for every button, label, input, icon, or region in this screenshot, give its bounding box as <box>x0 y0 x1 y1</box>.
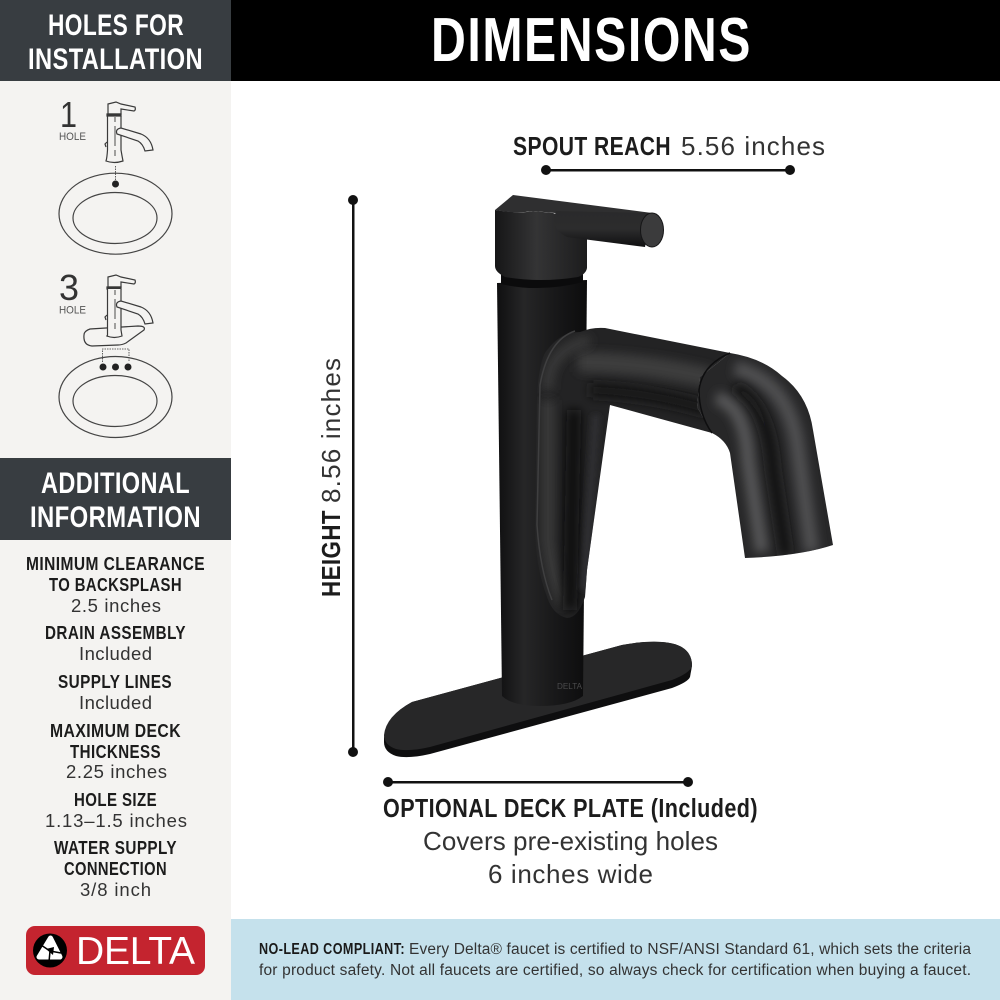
lever handle <box>554 211 652 247</box>
label: spout reach: 5.56 inches <box>681 131 825 161</box>
text block: optional deck plate: Covers pre-existing holes <box>423 826 718 856</box>
heading: additional information: INFORMATION <box>30 501 201 534</box>
lever top <box>495 195 652 213</box>
label: height: 8.56 inches <box>316 358 346 503</box>
icon: one hole installation: HOLE <box>59 131 86 143</box>
delta mark: DELTA <box>557 682 583 691</box>
text block: additional information specs: CONNECTION <box>64 859 167 879</box>
heading: holes for installation: HOLES FOR <box>48 9 184 42</box>
panel: white background <box>231 81 1000 919</box>
spout tip <box>697 353 833 558</box>
label: height <box>316 358 346 597</box>
text block: additional information specs: MAXIMUM DECK <box>50 721 181 741</box>
text block: optional deck plate: 6 inches wide <box>488 859 653 889</box>
logo: delta: DELTA <box>76 930 195 973</box>
text block: additional information specs: HOLE SIZE <box>74 790 157 810</box>
arrow: height measure <box>348 195 358 757</box>
text block: additional information specs: MINIMUM CLEARANCE <box>26 554 205 574</box>
icon: three hole installation: 3 <box>59 267 79 308</box>
arrow: deck plate measure <box>383 777 693 787</box>
deck plate <box>384 642 692 757</box>
text block: optional deck plate <box>383 795 758 889</box>
text block: additional information specs: DRAIN ASSEMBLY <box>45 623 186 643</box>
heading: holes for installation: INSTALLATION <box>28 43 203 76</box>
callout: no-lead compliant <box>231 919 1000 1000</box>
title: dimensions <box>231 0 1000 81</box>
logo: delta <box>26 926 205 975</box>
arrow: spout reach measure <box>541 165 795 175</box>
callout: no-lead compliant: Every Delta® faucet is certified to NSF/ANSI Standard 61, which sets the criteria <box>409 941 971 958</box>
heading: additional information: ADDITIONAL <box>41 467 190 500</box>
illustration: black faucet <box>384 195 840 757</box>
callout: no-lead compliant: NO-LEAD COMPLIANT: <box>259 941 405 958</box>
text block: additional information specs: SUPPLY LINES <box>58 672 172 692</box>
heading: holes for installation <box>0 0 231 81</box>
text block: additional information specs: Included <box>79 643 152 664</box>
text block: additional information specs: 2.25 inches <box>66 761 167 782</box>
icon: one hole installation: 1 <box>60 94 77 135</box>
text block: additional information specs: 2.5 inches <box>71 595 161 616</box>
text block: additional information specs <box>26 554 205 900</box>
title: dimensions: DIMENSIONS <box>431 6 752 75</box>
label: height: HEIGHT <box>318 510 346 597</box>
panel: left sidebar <box>0 0 231 1000</box>
text block: additional information specs: 1.13–1.5 inches <box>45 810 187 831</box>
spout swoosh rim <box>537 331 575 600</box>
text block: additional information specs: WATER SUPPLY <box>54 838 177 858</box>
spout arm and stem <box>538 328 729 618</box>
text block: additional information specs: Included <box>79 692 152 713</box>
text block: additional information specs: THICKNESS <box>70 742 161 762</box>
heading: additional information <box>0 458 231 540</box>
icon: three hole installation <box>59 267 172 438</box>
icon: three hole installation: HOLE <box>59 304 86 316</box>
head neck collar <box>501 268 583 288</box>
lever end cap <box>640 213 664 247</box>
label: spout reach: SPOUT REACH <box>513 133 671 161</box>
spout joint line <box>699 353 730 433</box>
text block: additional information specs: 3/8 inch <box>80 879 151 900</box>
body column <box>497 280 587 706</box>
icon: one hole installation <box>59 94 172 254</box>
head <box>495 210 587 280</box>
text block: optional deck plate: OPTIONAL DECK PLATE (Included) <box>383 795 758 823</box>
label: spout reach <box>513 131 825 161</box>
callout: no-lead compliant: for product safety. Not all faucets are certified, so always check for certification when buying a faucet. <box>259 962 971 979</box>
text block: additional information specs: TO BACKSPLASH <box>49 575 182 595</box>
